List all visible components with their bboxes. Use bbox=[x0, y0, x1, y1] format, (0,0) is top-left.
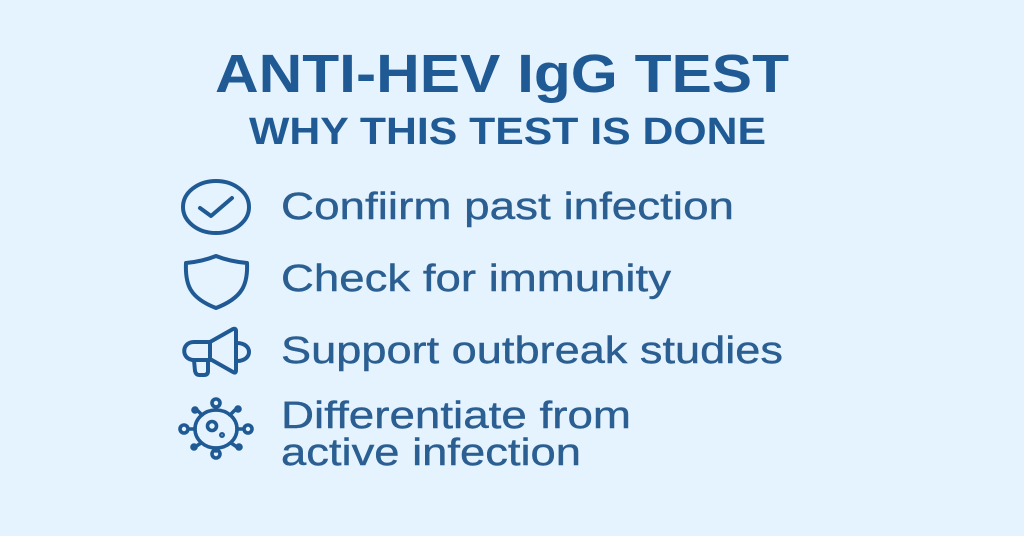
item: confirm past infection: Confiirm past infection bbox=[281, 186, 734, 228]
item: support outbreak studies: Support outbreak studies bbox=[281, 330, 783, 372]
icon: megaphone bbox=[184, 329, 249, 375]
item: differentiate from active infection: active infection bbox=[281, 432, 581, 474]
icon: check circle bbox=[183, 181, 249, 233]
icon: shield bbox=[186, 256, 247, 308]
item: check for immunity: Check for immunity bbox=[281, 258, 671, 300]
icon: virus bbox=[180, 399, 252, 458]
title: ANTI-HEV IgG TEST bbox=[215, 44, 789, 104]
item: differentiate from active infection bbox=[281, 395, 631, 474]
subtitle: WHY THIS TEST IS DONE bbox=[249, 111, 766, 153]
item: differentiate from active infection: Differentiate from bbox=[281, 395, 631, 437]
